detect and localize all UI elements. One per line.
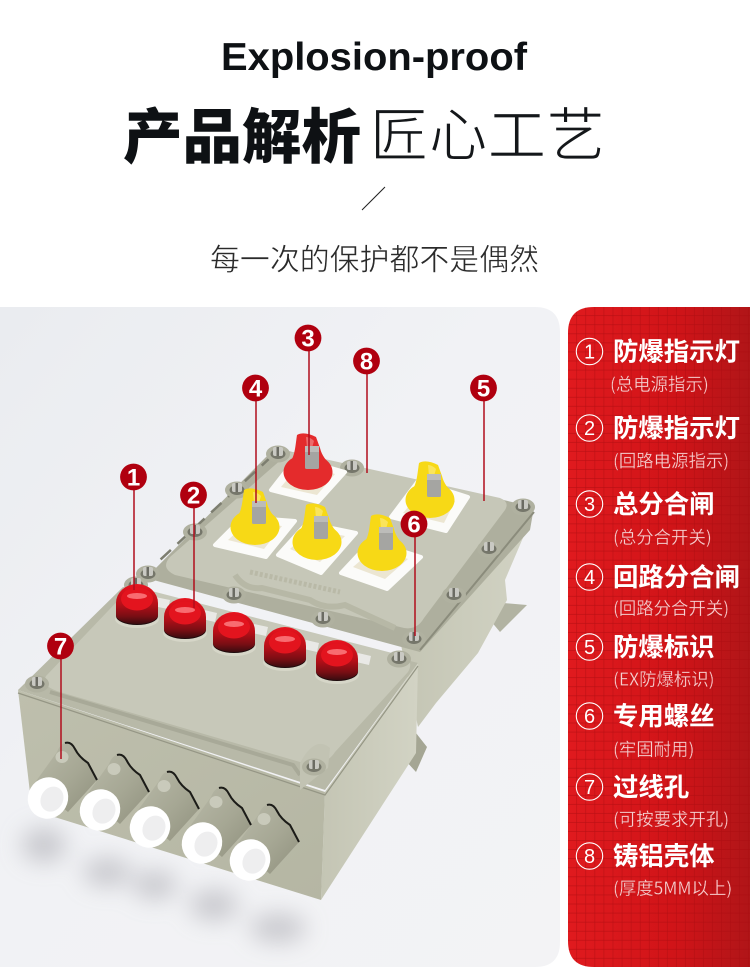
switch plates xyxy=(215,458,468,589)
legend item 7 xyxy=(576,768,729,832)
panel: product photo xyxy=(0,307,560,967)
legend item 4: 4 xyxy=(584,567,595,589)
bolts on back enclosure xyxy=(136,446,535,648)
callout lines xyxy=(61,350,484,759)
legend item 7: (可按要求开孔) xyxy=(613,806,729,832)
legend item 1 xyxy=(576,332,740,396)
legend item 5: 5 xyxy=(584,637,595,659)
marker 8 xyxy=(353,348,380,376)
marker 5 xyxy=(470,375,497,403)
legend item 7: 过线孔 xyxy=(613,768,689,804)
marker 1: 1 xyxy=(127,465,140,492)
marker 1 xyxy=(120,464,147,492)
legend item 2: 2 xyxy=(584,418,595,440)
legend item 6 xyxy=(576,697,715,762)
heading: light craftsmanship: 匠心工艺 xyxy=(370,88,605,173)
indicator label stickers xyxy=(153,597,371,665)
legend item 1: 1 xyxy=(584,342,595,364)
red main switch knob xyxy=(284,433,332,490)
legend item 2: (回路电源指示) xyxy=(613,448,729,473)
legend item 4 xyxy=(576,558,740,620)
back enclosure xyxy=(136,433,535,772)
marker 3 xyxy=(295,325,321,353)
bolts on front enclosure xyxy=(25,576,411,776)
slash divider xyxy=(362,187,385,210)
marker 8: 8 xyxy=(360,349,373,376)
legend item 5 xyxy=(576,628,715,692)
legend item 3: 3 xyxy=(584,494,595,516)
legend item 1: (总电源指示) xyxy=(610,372,709,396)
legend item 5: (EX防爆标识) xyxy=(613,666,715,692)
marker 3: 3 xyxy=(301,326,315,353)
heading: bold product analysis: 产品解析 xyxy=(123,90,361,176)
indicator lamps xyxy=(115,584,359,684)
legend item 2: 防爆指示灯 xyxy=(613,409,740,445)
cable glands xyxy=(20,743,299,888)
legend item 8: 8 xyxy=(584,846,595,868)
legend item 5: 防爆标识 xyxy=(613,628,715,664)
panel: red legend xyxy=(568,307,750,967)
front enclosure xyxy=(18,576,418,900)
legend item 8: 铸铝壳体 xyxy=(613,837,715,873)
legend item 6: (牢固耐用) xyxy=(613,736,694,762)
subtitle: 每一次的保护都不是偶然 xyxy=(210,235,539,279)
legend item 6: 专用螺丝 xyxy=(613,697,715,733)
marker 2: 2 xyxy=(187,483,200,510)
marker 2 xyxy=(180,482,207,510)
marker 5: 5 xyxy=(477,376,490,403)
marker 7: 7 xyxy=(54,634,67,661)
legend item 4: (回路分合开关) xyxy=(613,596,729,620)
floor shadows xyxy=(22,828,306,942)
legend item 1: 防爆指示灯 xyxy=(613,332,740,368)
legend item 4: 回路分合闸 xyxy=(613,558,740,594)
title: Explosion-proof: Explosion-proof xyxy=(221,36,528,79)
legend item 8 xyxy=(576,837,732,900)
legend item 2 xyxy=(576,409,740,473)
marker 7 xyxy=(47,633,74,661)
marker 4 xyxy=(242,375,269,403)
legend item 6: 6 xyxy=(584,706,595,728)
yellow branch switch knobs xyxy=(230,461,454,571)
legend item 3: (总分合开关) xyxy=(613,524,712,550)
legend item 7: 7 xyxy=(584,777,595,799)
legend item 8: (厚度5MM以上) xyxy=(613,876,732,900)
marker 4: 4 xyxy=(249,376,263,403)
legend item 3 xyxy=(576,485,715,550)
legend item 3: 总分合闸 xyxy=(613,485,715,521)
marker 6: 6 xyxy=(407,512,421,539)
marker 6 xyxy=(401,511,427,539)
